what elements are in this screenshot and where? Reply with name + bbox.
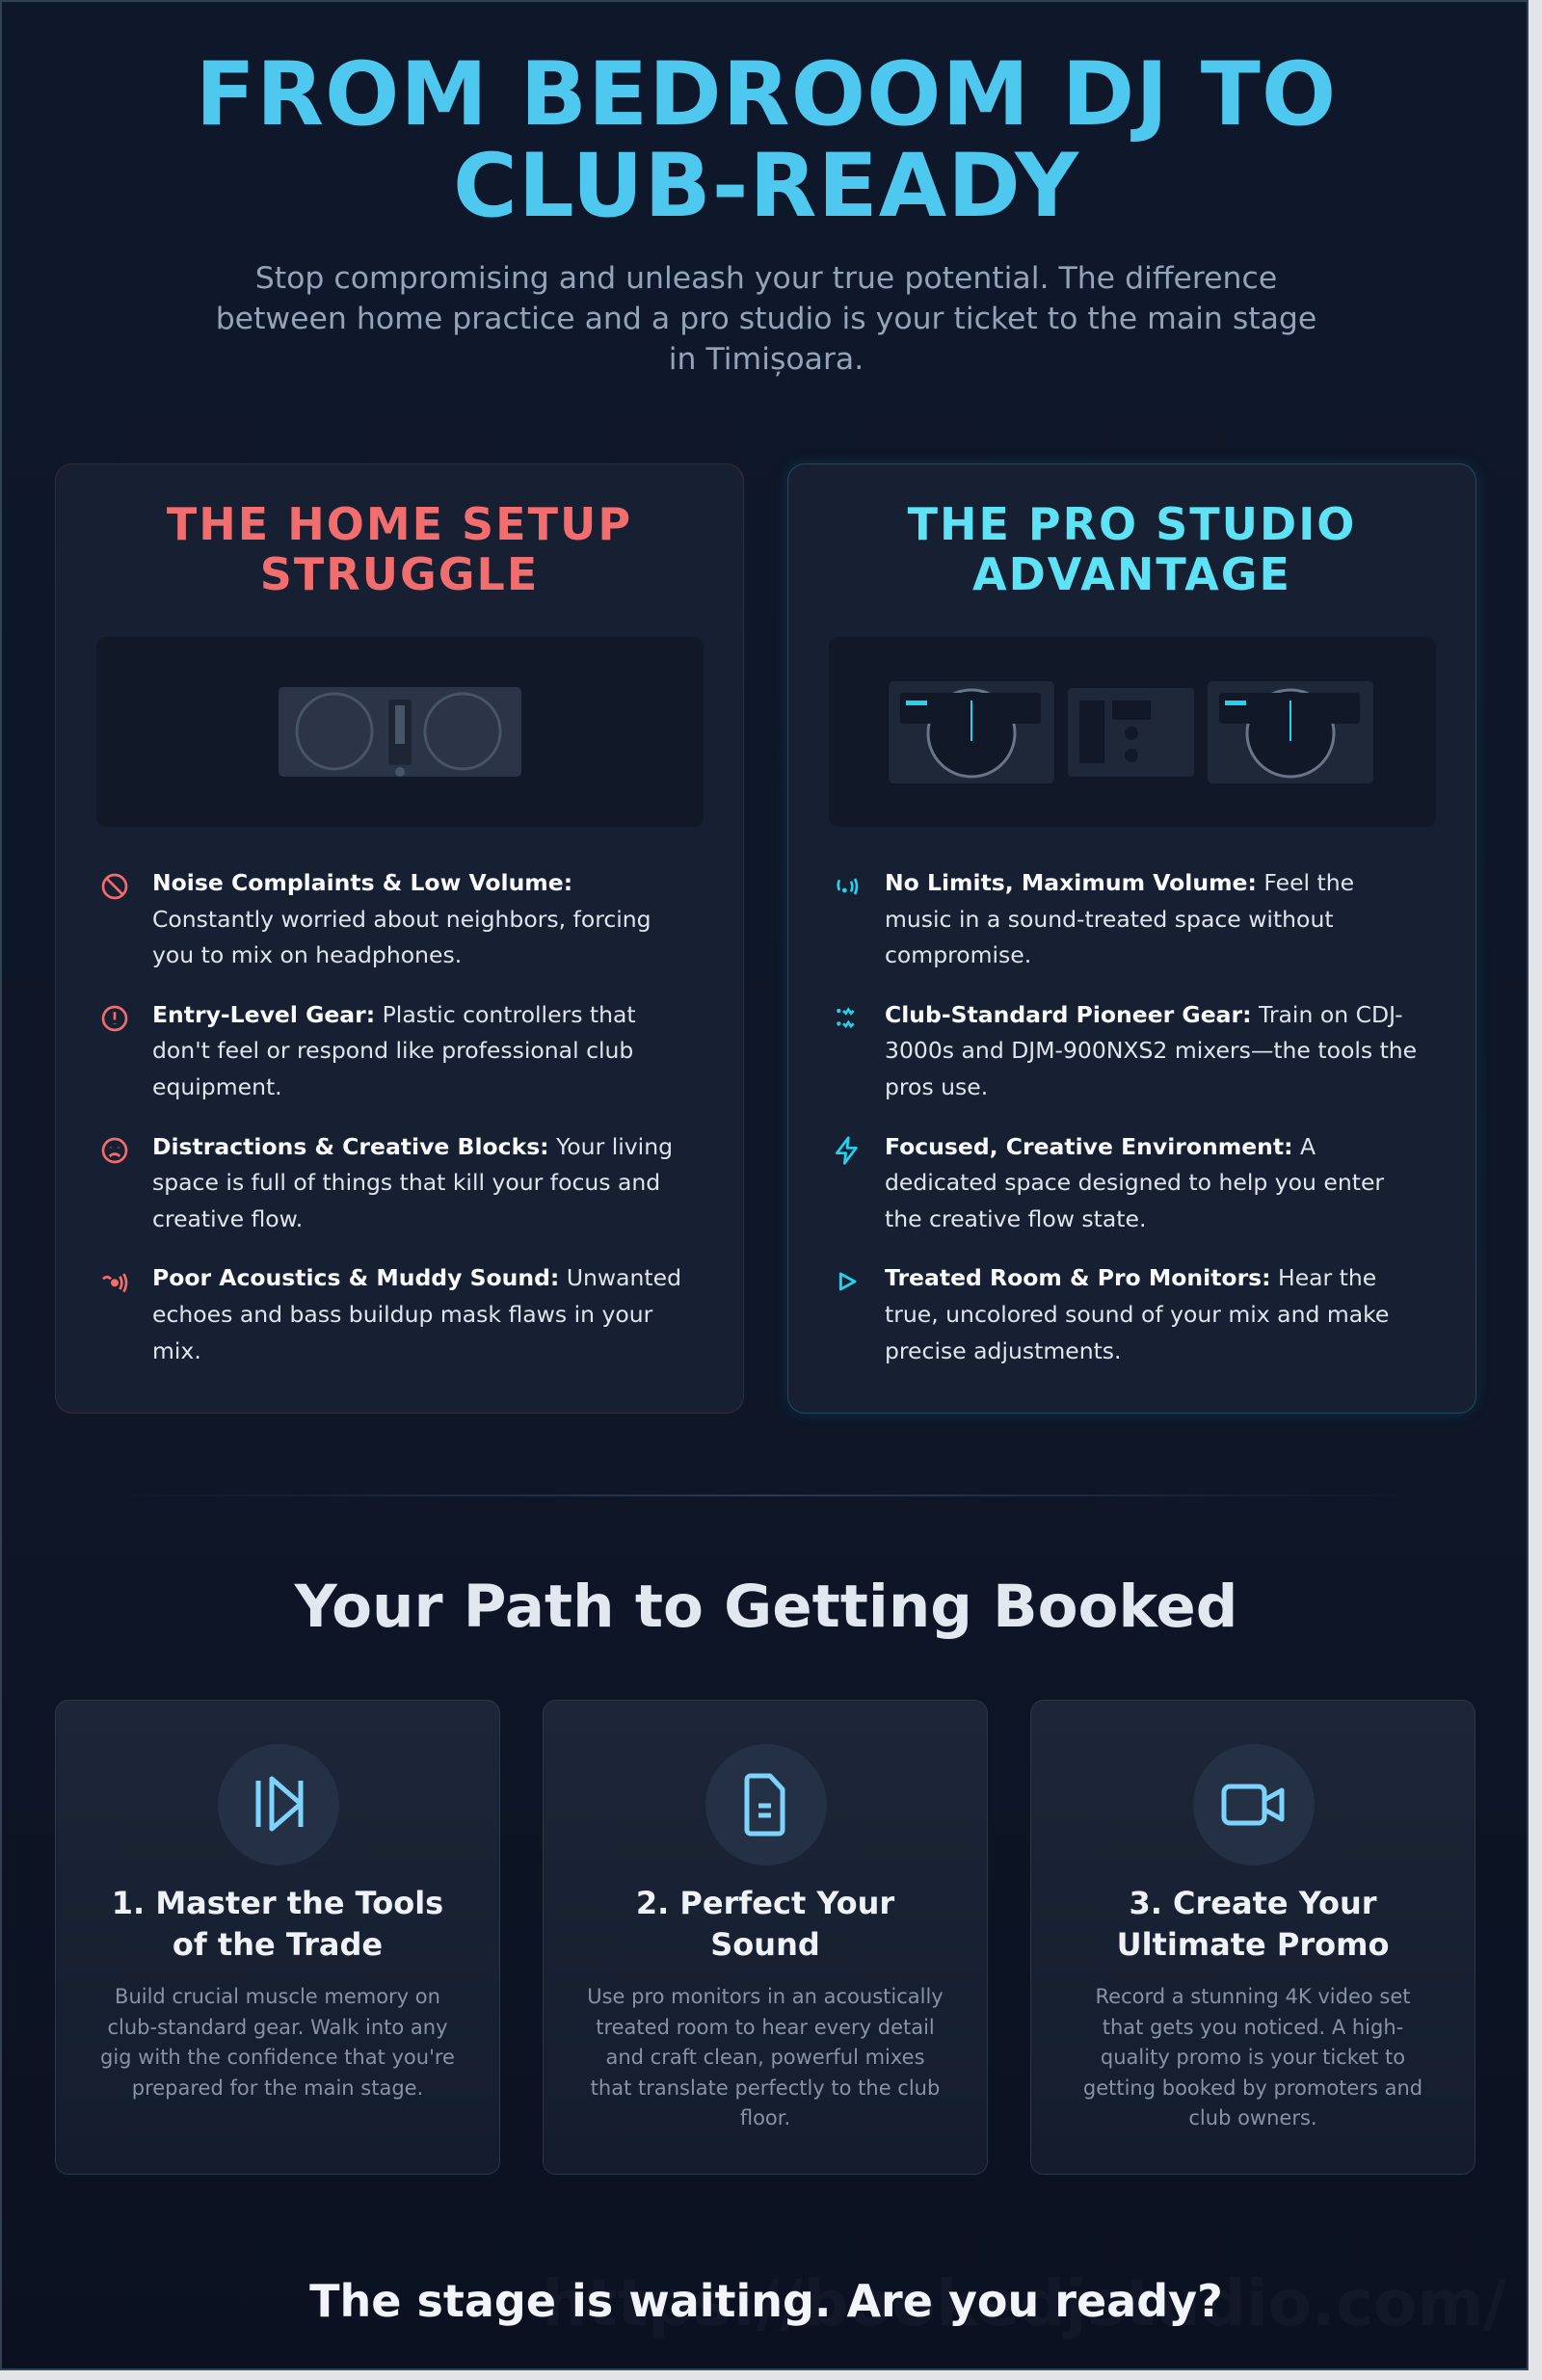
heading: home setup: THE HOME SETUP: [167, 498, 632, 550]
item: noise complaints: Noise Complaints & Low Volume:: [152, 869, 572, 896]
subtitle: between home practice and a pro studio is your ticket to the main stage: [216, 302, 1316, 336]
item: pioneer gear: [837, 1001, 1417, 1100]
item: distractions: [102, 1133, 673, 1232]
item: pioneer gear: 3000s and DJM-900NXS2 mixers—the tools the: [885, 1037, 1417, 1064]
heading: home setup: [167, 498, 632, 600]
card: step 2: 2. Perfect Your: [636, 1885, 894, 1921]
item: treated room: true, uncolored sound of your mix and make: [885, 1301, 1389, 1328]
item: no limits: [837, 869, 1354, 968]
card: step 2: that translate perfectly to the club: [591, 2076, 940, 2099]
item: focused environment: [835, 1133, 1384, 1232]
card: step 3: [1030, 1700, 1476, 2175]
card: step 2: treated room to hear every detail: [596, 2016, 935, 2039]
heading: pro studio: THE PRO STUDIO: [908, 498, 1356, 550]
item: no limits: No Limits, Maximum Volume: Feel the: [885, 869, 1354, 896]
card: step 2: [543, 1700, 988, 2175]
card: step 3: that gets you noticed. A high-: [1103, 2016, 1403, 2039]
item: noise complaints: you to mix on headphones.: [152, 941, 462, 968]
item: focused environment: dedicated space designed to help you enter: [885, 1169, 1384, 1196]
item: pioneer gear: pros use.: [885, 1073, 988, 1100]
card: step 1: Build crucial muscle memory on: [115, 1985, 440, 2008]
footer tagline: The stage is waiting. Are you ready?: [309, 2275, 1223, 2327]
item: entry-level gear: equipment.: [152, 1073, 282, 1100]
icon: video camera: [1193, 1744, 1315, 1865]
illustration: CDJs and mixer: [829, 637, 1436, 827]
card: step 3: getting booked by promoters and: [1083, 2076, 1422, 2099]
card: step 3: club owners.: [1188, 2106, 1317, 2129]
title: [196, 44, 1337, 237]
item: no limits: music in a sound-treated space without: [885, 906, 1334, 933]
heading: pro studio: [908, 498, 1356, 600]
item: no limits: compromise.: [885, 941, 1031, 968]
card: step 1: club-standard gear. Walk into any: [107, 2016, 448, 2039]
item: entry-level gear: [102, 1001, 636, 1100]
title: CLUB-READY: [453, 136, 1079, 237]
card: step 2: and craft clean, powerful mixes: [605, 2046, 925, 2069]
item: treated room: precise adjustments.: [885, 1337, 1122, 1364]
list: struggles: [102, 869, 681, 1364]
item: distractions: space is full of things that kill your focus and: [152, 1169, 660, 1196]
item: noise complaints: [102, 869, 651, 968]
list: advantages: [835, 869, 1417, 1364]
item: focused environment: the creative flow state.: [885, 1205, 1146, 1232]
card: step 1: [55, 1700, 500, 2175]
panel: pro studio advantage: [787, 463, 1476, 1414]
section heading: path: Your Path to Getting Booked: [295, 1573, 1237, 1641]
card: step 3: 3. Create Your: [1129, 1885, 1377, 1921]
subtitle: Stop compromising and unleash your true potential. The difference: [255, 261, 1277, 296]
card: step 1: of the Trade: [173, 1926, 383, 1963]
illustration: controller: [96, 637, 704, 827]
card: step 3: quality promo is your ticket to: [1101, 2046, 1405, 2069]
item: entry-level gear: Entry-Level Gear: Plastic controllers that: [152, 1001, 636, 1028]
item: distractions: creative flow.: [152, 1205, 303, 1232]
card: step 2: Sound: [710, 1926, 820, 1963]
card: step 1: 1. Master the Tools: [112, 1885, 443, 1921]
subtitle: in Timișoara.: [669, 342, 864, 377]
card: step 1: prepared for the main stage.: [132, 2076, 423, 2099]
item: noise complaints: Constantly worried about neighbors, forcing: [152, 906, 651, 933]
card: step 3: Record a stunning 4K video set: [1096, 1985, 1410, 2008]
subtitle: [216, 261, 1316, 377]
title: FROM BEDROOM DJ TO: [196, 44, 1337, 145]
heading: home setup: STRUGGLE: [260, 548, 539, 600]
card: step 1: gig with the confidence that you're: [100, 2046, 455, 2069]
item: focused environment: Focused, Creative Environment: A: [885, 1133, 1316, 1160]
icon: skip: [218, 1744, 339, 1865]
item: treated room: Treated Room & Pro Monitors: Hear the: [885, 1264, 1376, 1291]
card: step 2: floor.: [740, 2106, 790, 2129]
item: treated room: [838, 1264, 1389, 1364]
panel: home setup struggle: [55, 463, 744, 1414]
card: step 2: Use pro monitors in an acoustically: [587, 1985, 944, 2008]
item: pioneer gear: Club-Standard Pioneer Gear: Train on CDJ-: [885, 1001, 1403, 1028]
watermark: https://bookedjstudio.com/: [542, 2266, 1506, 2340]
item: acoustics: Poor Acoustics & Muddy Sound: Unwanted: [152, 1264, 681, 1291]
card: step 3: Ultimate Promo: [1117, 1926, 1389, 1963]
item: acoustics: [102, 1264, 681, 1364]
item: acoustics: echoes and bass buildup mask flaws in your: [152, 1301, 652, 1328]
item: distractions: Distractions & Creative Blocks: Your living: [152, 1133, 673, 1160]
heading: pro studio: ADVANTAGE: [972, 548, 1291, 600]
icon: document: [705, 1744, 827, 1865]
item: acoustics: mix.: [152, 1337, 201, 1364]
item: entry-level gear: don't feel or respond like professional club: [152, 1037, 633, 1064]
